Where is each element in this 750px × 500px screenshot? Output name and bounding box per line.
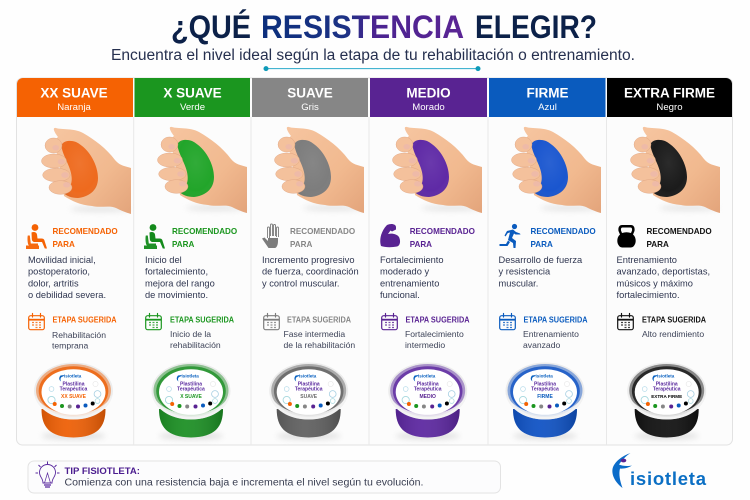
suggested stage text: intermedio [405, 340, 445, 350]
product jar: gray: Terapéutica [295, 386, 323, 392]
title divider [264, 66, 480, 71]
suggested stage text: de la rehabilitación [284, 340, 355, 350]
recommended heading: PARA [410, 240, 432, 249]
product jar: gray: SUAVE [300, 394, 318, 400]
product jar: orange: isiotleta [64, 374, 82, 378]
suggested stage text: Alto rendimiento [642, 329, 704, 339]
icon: calendar [146, 314, 161, 330]
recommended text: Incremento progresivo [262, 255, 354, 265]
recommended text: y control muscular. [262, 278, 340, 288]
recommended heading: RECOMENDADO [52, 227, 118, 236]
recommended text: funcional. [380, 290, 420, 300]
product jar: purple: Plastilina [417, 382, 439, 388]
product jar: purple: Terapéutica [414, 386, 442, 392]
icon: light bulb [36, 462, 60, 487]
product jar: orange: XX SUAVE [61, 394, 87, 400]
product jar: blue [506, 362, 584, 440]
header: Medio: Morado [412, 102, 445, 113]
column: Extra firme [607, 78, 732, 440]
recommended text: Desarrollo de fuerza [498, 255, 583, 265]
recommended heading: RECOMENDADO [290, 227, 355, 236]
column: XX suave [17, 78, 133, 440]
recommended text: mejora del rango [145, 278, 215, 288]
product jar: green: Terapéutica [177, 386, 205, 392]
suggested stage heading: ETAPA SUGERIDA [524, 316, 588, 324]
column: X suave [134, 78, 250, 440]
column: Firme [489, 78, 606, 440]
tip text: Comienza con una resistencia baja e incrementa el nivel según tu evolución. [64, 478, 424, 488]
tip heading: TIP FISIOTLETA: [64, 466, 140, 477]
recommended heading: PARA [172, 240, 194, 249]
product jar: black [627, 362, 706, 440]
recommended text: Movilidad inicial, [28, 255, 96, 265]
icon: hand [262, 224, 278, 248]
suggested stage heading: ETAPA SUGERIDA [406, 316, 470, 324]
suggested stage text: Fase intermedia [284, 329, 345, 339]
suggested stage text: avanzado [523, 340, 560, 350]
recommended text: o debilidad severa. [28, 290, 106, 300]
recommended text: de fuerza, coordinación [262, 267, 359, 277]
recommended text: avanzado, deportistas, [616, 267, 710, 277]
column: Medio [370, 78, 487, 440]
product jar: black: EXTRA FIRME [651, 394, 682, 399]
header: X suave: Verde [180, 102, 205, 113]
title: ¿QUÉ [171, 9, 251, 45]
hand squeezing orange putty [42, 128, 131, 214]
icon: calendar [618, 314, 633, 330]
recommended heading: RECOMENDADO [646, 227, 712, 236]
recommended text: y resistencia [498, 267, 551, 277]
recommended heading: PARA [530, 240, 553, 249]
recommended heading: PARA [646, 240, 669, 249]
recommended text: Inicio del [145, 255, 182, 265]
product jar: blue: Terapéutica [531, 386, 559, 392]
recommended text: músicos y máximo [616, 278, 693, 288]
recommended text: postoperatorio, [28, 267, 90, 277]
suggested stage text: Fortalecimiento [405, 329, 464, 339]
icon: flexed bicep [380, 224, 400, 247]
recommended text: fortalecimiento, [145, 267, 208, 277]
recommended heading: RECOMENDADO [530, 227, 596, 236]
recommended text: fortalecimiento. [616, 290, 680, 300]
product jar: orange [34, 362, 113, 440]
product jar: green: X SUAVE [180, 394, 202, 400]
recommended text: dolor, artritis [28, 278, 79, 288]
header: Suave: Gris [301, 102, 319, 113]
product jar: black: Plastilina [656, 382, 678, 388]
hand squeezing purple putty [392, 127, 482, 213]
product jar: purple [388, 362, 467, 440]
suggested stage heading: ETAPA SUGERIDA [642, 316, 706, 324]
product jar: green [152, 362, 230, 440]
product jar: gray: Plastilina [298, 382, 320, 388]
suggested stage text: temprana [52, 340, 89, 350]
recommended heading: PARA [52, 240, 75, 249]
product jar: gray [269, 362, 348, 440]
suggested stage text: Entrenamiento [523, 329, 579, 339]
recommended heading: PARA [290, 240, 312, 249]
hand squeezing black putty [630, 127, 720, 213]
product jar: purple: MEDIO [420, 394, 436, 400]
hand squeezing green putty [158, 127, 247, 213]
product jar: blue: FIRME [537, 394, 553, 400]
suggested stage heading: ETAPA SUGERIDA [170, 316, 234, 324]
product jar: blue: isiotleta [536, 374, 553, 378]
logo: fisiotleta [612, 453, 707, 489]
icon: kettlebell [617, 225, 636, 248]
recommended text: Entrenamiento [616, 255, 677, 265]
header: X suave [134, 78, 250, 117]
header: Extra firme [607, 78, 732, 117]
header: Firme: Azul [538, 102, 557, 113]
suggested stage text: Rehabilitación [52, 330, 106, 340]
header: Suave [252, 78, 368, 117]
recommended heading: RECOMENDADO [172, 227, 237, 236]
header: Extra firme: EXTRA FIRME [624, 86, 715, 100]
column: Suave [252, 78, 368, 440]
icon: seated person exercising [144, 224, 165, 249]
product jar: gray: isiotleta [299, 374, 317, 378]
icon: calendar [29, 314, 44, 330]
tip box [28, 461, 500, 493]
header: Medio [370, 78, 487, 117]
recommended text: de movimiento. [145, 290, 208, 300]
icon: calendar [500, 314, 515, 330]
suggested stage heading: ETAPA SUGERIDA [52, 316, 117, 324]
title [171, 9, 597, 45]
icon: runner [500, 224, 520, 248]
header: Firme: FIRME [526, 86, 568, 100]
product jar: blue: Plastilina [534, 382, 556, 388]
recommended text: Fortalecimiento [380, 255, 444, 265]
header: X suave: X SUAVE [163, 86, 222, 100]
recommended text: entrenamiento [380, 278, 439, 288]
hand squeezing gray putty [274, 127, 364, 213]
suggested stage heading: ETAPA SUGERIDA [287, 316, 351, 324]
header: XX suave: XX SUAVE [40, 86, 108, 100]
hand squeezing blue putty [512, 127, 601, 213]
product jar: green: Plastilina [180, 382, 202, 388]
header: XX suave: Naranja [57, 102, 91, 113]
title: RESISTENCIA [261, 9, 464, 45]
title: ELEGIR? [475, 9, 597, 45]
recommended text: muscular. [498, 278, 538, 288]
icon: seated person [26, 224, 47, 249]
header: Extra firme: Negro [656, 102, 683, 113]
logo: fisiotleta: isiotleta [630, 468, 707, 489]
product jar: orange: Terapéutica [60, 386, 88, 392]
product jar: black: isiotleta [657, 374, 675, 378]
recommended text: moderado y [380, 267, 429, 277]
header: XX suave [17, 78, 133, 117]
subtitle: Encuentra el nivel ideal según la etapa de tu rehabilitación o entrenamiento. [111, 47, 635, 64]
suggested stage text: rehabilitación [170, 340, 221, 350]
icon: calendar [264, 314, 279, 330]
header: Medio: MEDIO [406, 86, 451, 100]
product jar: purple: isiotleta [418, 374, 436, 378]
product jar: orange: Plastilina [63, 382, 85, 388]
recommended heading: RECOMENDADO [410, 227, 475, 236]
product jar: green: isiotleta [182, 374, 199, 378]
product jar: black: Terapéutica [653, 386, 681, 392]
comparison table card [16, 78, 732, 445]
header: Suave: SUAVE [287, 86, 333, 100]
suggested stage text: Inicio de la [170, 329, 211, 339]
icon: calendar [382, 314, 397, 330]
header: Firme [489, 78, 606, 117]
